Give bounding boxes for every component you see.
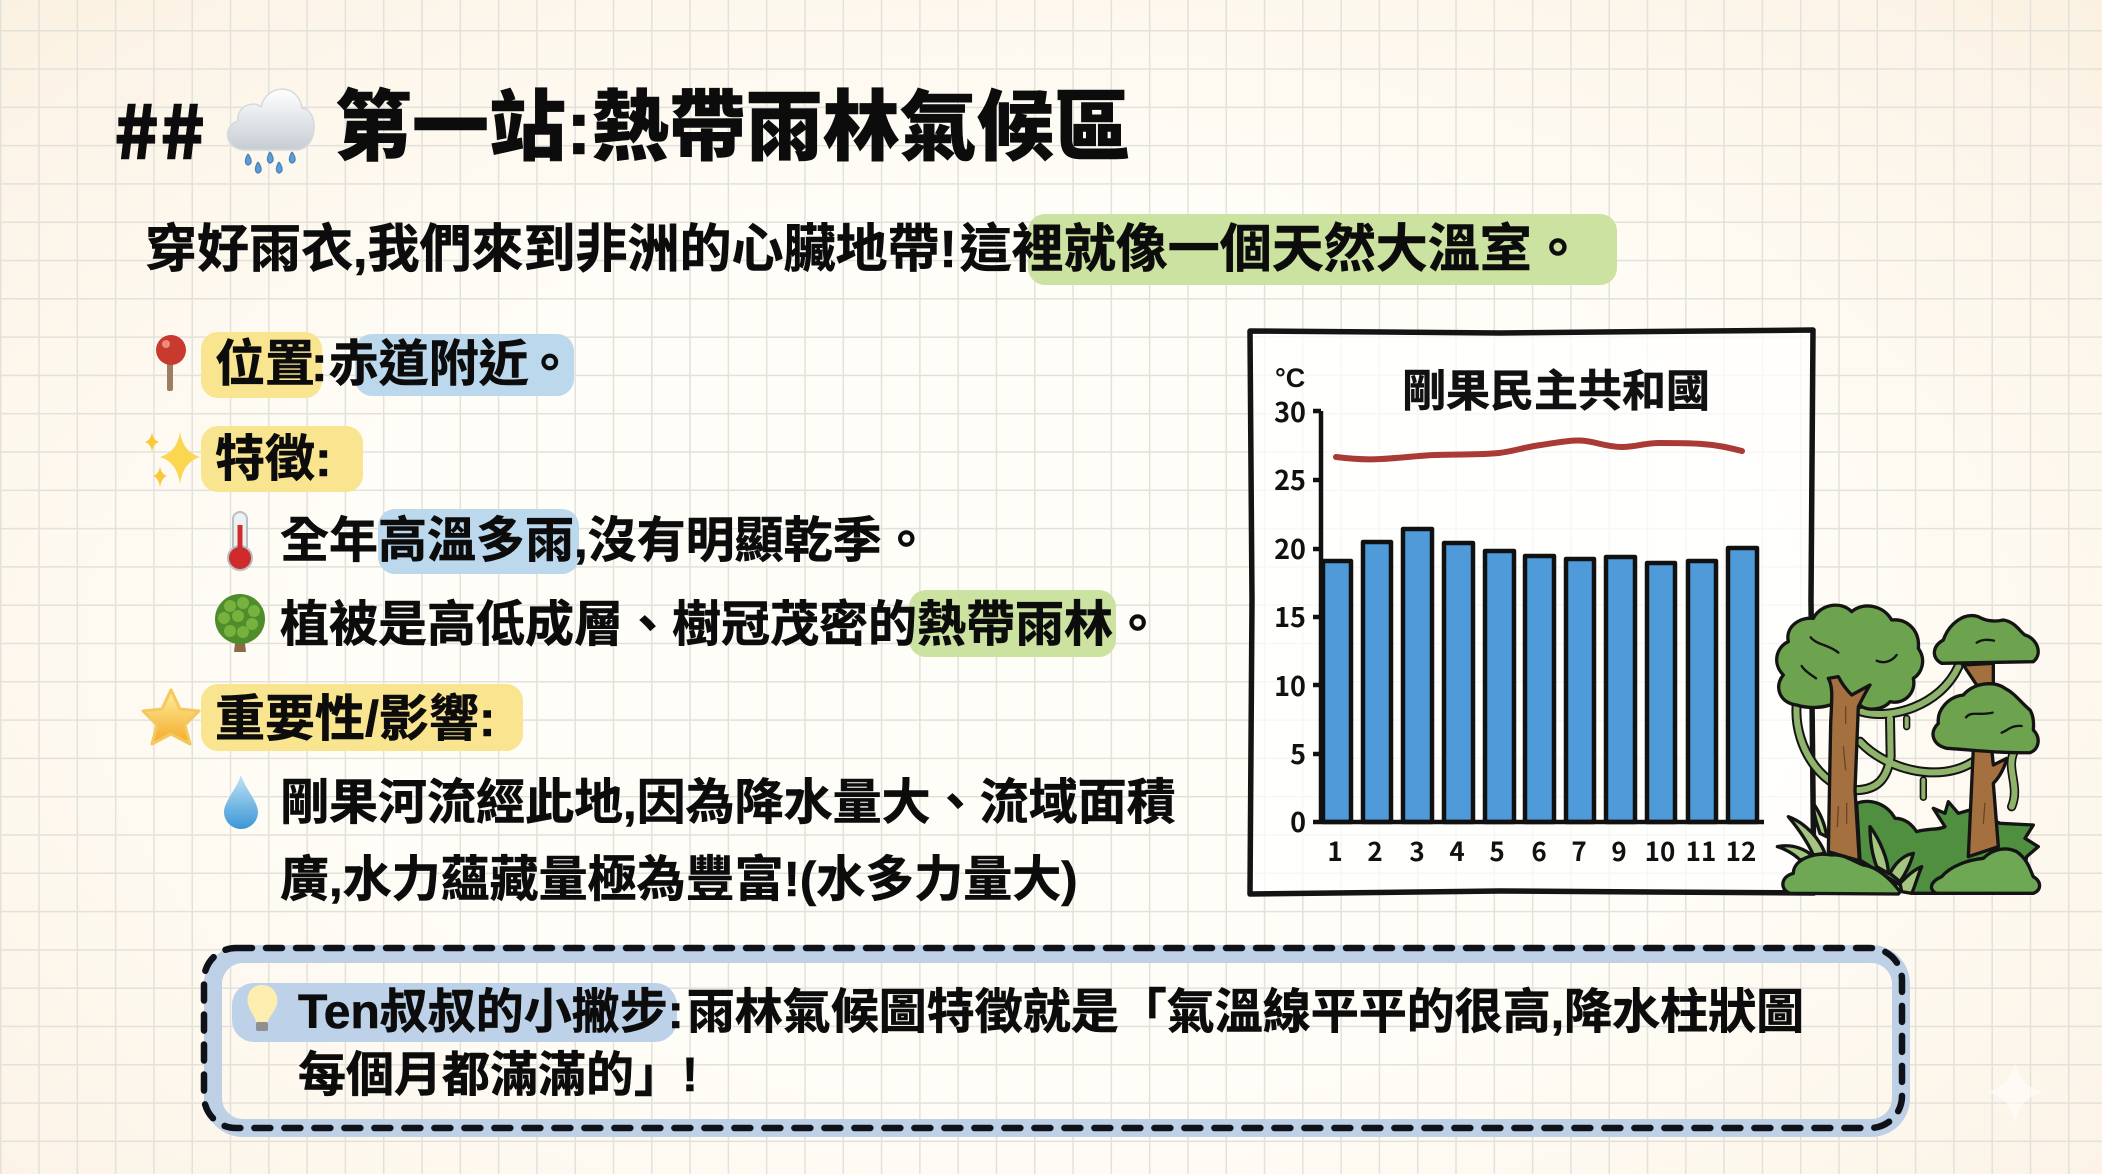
small upper trunk: [1963, 663, 1993, 685]
callout text line 1: Ten叔叔的小撇步:雨林氣候圖特徵就是「氣溫線平平的很高,降水柱狀圖: [298, 986, 1804, 1039]
title text: 第一站:熱帶雨林氣候區: [335, 85, 1131, 171]
vegetation text: 植被是高低成層、樹冠茂密的熱帶雨林。: [280, 598, 1162, 652]
left trunk: [1828, 677, 1870, 861]
y axis labels: 25: [1274, 459, 1306, 498]
vines: [1796, 667, 2015, 807]
icon: water drop: [224, 775, 258, 829]
intro text: 穿好雨衣,我們來到非洲的心臟地帶!這裡就像一個天然大溫室。: [145, 221, 1584, 279]
icon: thermometer: [227, 511, 253, 571]
y axis labels: 15: [1274, 596, 1306, 635]
label: location: [201, 332, 322, 398]
y axis labels: 30: [1274, 391, 1306, 430]
left crown: [1777, 605, 1923, 709]
highlight: greenhouse: [1028, 214, 1617, 285]
y axis labels: 5: [1290, 733, 1306, 772]
highlight: hot and rainy: [378, 509, 579, 574]
axes: [1313, 411, 1764, 822]
icon: round pin: [156, 335, 186, 391]
importance detail: [224, 775, 1176, 907]
callout label highlight: [232, 983, 677, 1042]
callout text line 2: 每個月都滿滿的」!: [298, 1049, 698, 1102]
y axis labels: [1274, 391, 1306, 840]
background bush: [1857, 801, 2038, 893]
detail line 1: 剛果河流經此地,因為降水量大、流域面積: [280, 776, 1176, 830]
importance heading: [141, 684, 523, 751]
location text: 位置:赤道附近。: [215, 336, 575, 392]
icon: light bulb: [248, 985, 278, 1031]
highlight: rainforest: [909, 590, 1116, 657]
temperature line: [1336, 440, 1742, 459]
month labels: 10: [1645, 832, 1675, 869]
top right crown: [1934, 616, 2038, 663]
month labels: 12: [1726, 832, 1756, 869]
label: importance: [201, 684, 523, 751]
detail line 2: 廣,水力蘊藏量極為豐富!(水多力量大): [280, 853, 1078, 907]
title prefix: ##: [114, 74, 206, 181]
month labels: [1327, 832, 1756, 869]
month labels: 9: [1611, 832, 1627, 869]
y axis labels: 10: [1274, 665, 1306, 704]
month labels: 2: [1367, 832, 1383, 869]
month labels: 1: [1327, 832, 1343, 869]
icon: sparkles: [145, 432, 200, 488]
intro sentence: [145, 214, 1617, 285]
icon: star: [141, 688, 200, 746]
y axis unit: °C: [1275, 363, 1305, 393]
month labels: 5: [1489, 832, 1505, 869]
title: [114, 74, 1131, 181]
location row: [156, 332, 575, 398]
feature: climate: [227, 509, 931, 574]
chart title: 剛果民主共和國: [1402, 367, 1710, 416]
callout border: [200, 944, 1910, 1137]
month labels: 11: [1686, 832, 1716, 869]
right trunk: [1968, 748, 2007, 857]
illustration: rainforest trees: [1775, 604, 2042, 896]
features text: 特徵:: [215, 431, 332, 487]
leaf and bark marks: [1802, 637, 2022, 733]
chart frame: [1250, 330, 1814, 894]
y axis labels: 20: [1274, 528, 1306, 567]
features heading: [145, 426, 363, 492]
label: features: [201, 426, 363, 492]
highlight: equator: [355, 334, 574, 396]
month labels: 3: [1409, 832, 1425, 869]
month labels: 4: [1449, 832, 1465, 869]
icon: rain cloud: [226, 88, 315, 174]
grass leaves: [1777, 803, 1922, 893]
month labels: 6: [1531, 832, 1547, 869]
y axis labels: 0: [1290, 801, 1306, 840]
precipitation bars: [1323, 529, 1757, 822]
foreground bushes: [1783, 854, 1900, 894]
feature: vegetation: [215, 590, 1162, 657]
importance text: 重要性/影響:: [215, 691, 496, 747]
watermark sparkle: [1988, 1064, 2042, 1120]
month labels: 7: [1571, 832, 1587, 869]
icon: tree: [215, 594, 265, 652]
callout: [200, 944, 1910, 1137]
lower right crown: [1933, 684, 2038, 753]
climate text: 全年高溫多雨,沒有明顯乾季。: [280, 514, 931, 568]
